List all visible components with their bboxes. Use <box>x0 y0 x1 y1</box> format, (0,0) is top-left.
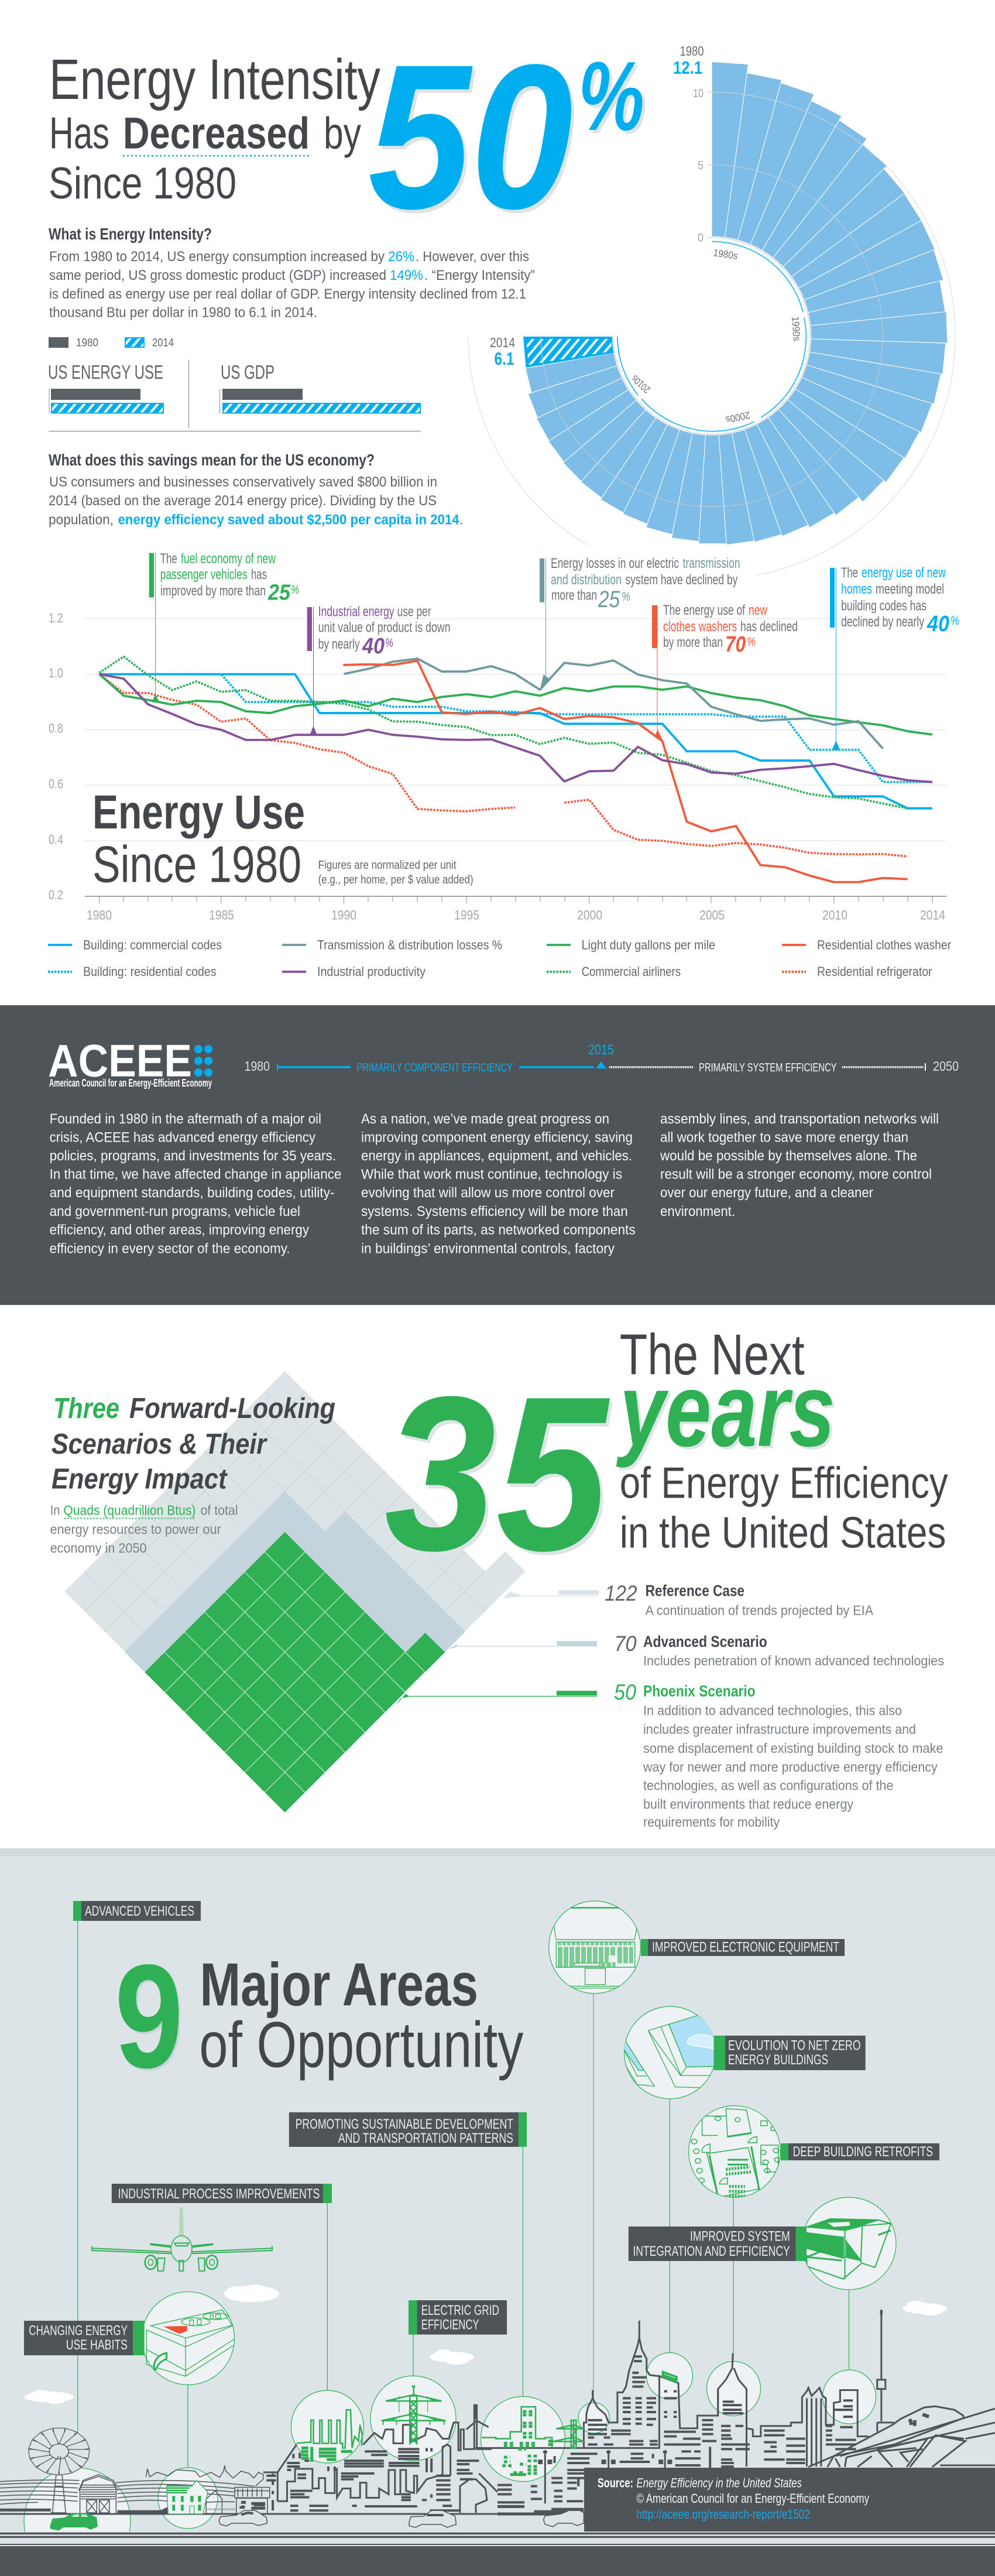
callout: new homes: % <box>951 614 959 628</box>
text block: what is energy intensity: From 1980 to 2014, US energy consumption increased by <box>49 249 385 265</box>
big number 35: 35 <box>385 1351 612 1597</box>
text column 3: over our energy future, and a cleaner <box>660 1185 873 1201</box>
windows <box>239 2448 479 2510</box>
scenario: phoenix: some displacement of existing building stock to make <box>643 1741 943 1756</box>
label: promoting sustainable development: AND TRANSPORTATION PATTERNS <box>338 2130 513 2146</box>
text column 2: As a nation, we’ve made great progress on <box>361 1111 609 1127</box>
timeline: 2050 <box>933 1059 959 1074</box>
text column 3: assembly lines, and transportation networks will <box>660 1111 939 1127</box>
label: industrial process improvements: INDUSTRIAL PROCESS IMPROVEMENTS <box>118 2186 320 2202</box>
callout: fuel economy <box>149 551 299 703</box>
callout: industrial energy: unit value of product is down <box>318 620 451 636</box>
note: normalized figures <box>318 859 474 886</box>
scenario: phoenix: Phoenix Scenario <box>643 1682 756 1700</box>
text block: savings: population, <box>49 512 114 528</box>
label: improved system integration and efficiency <box>629 2226 807 2261</box>
skyline: farm and town <box>0 2405 498 2527</box>
callout: industrial energy: % <box>385 636 393 650</box>
x axis labels: 2005 <box>699 907 725 923</box>
text block: savings: . <box>459 512 464 528</box>
text column 1 <box>50 1111 341 1256</box>
logo: ACEEE: American Council for an Energy-Efficient Economy <box>49 1077 212 1089</box>
scenario: phoenix: In addition to advanced technologies, this also <box>643 1703 902 1718</box>
scenario: advanced: Includes penetration of known advanced technologies <box>643 1653 944 1669</box>
text column 2: systems. Systems efficiency will be more than <box>361 1204 628 1220</box>
label: evolution to net zero energy buildings: ENERGY BUILDINGS <box>728 2052 828 2068</box>
scenario: phoenix: includes greater infrastructure improvements and <box>643 1722 916 1737</box>
callout: transmission losses: and distribution <box>551 572 622 588</box>
windmill lattice <box>51 2456 67 2513</box>
chart legend: Light duty gallons per mile <box>582 938 715 953</box>
label: improved system integration and efficiency: IMPROVED SYSTEM <box>690 2228 790 2245</box>
text column 3: result will be a stronger economy, more control <box>660 1166 932 1182</box>
text column 2: energy in appliances, equipment, and vehicles. <box>361 1148 632 1164</box>
callout: fuel economy: has <box>251 567 267 583</box>
line chart: energy use since 1980 <box>48 551 959 979</box>
icon: transmission tower <box>381 2386 446 2444</box>
bar chart: US GDP <box>220 361 421 413</box>
icon: net zero window <box>624 2006 719 2099</box>
title: by <box>324 109 361 158</box>
y axis labels: 0.4 <box>49 832 63 847</box>
callout: new homes: building codes has <box>841 598 927 614</box>
y axis labels: 1.0 <box>49 666 63 680</box>
text column 1: and government-run programs, vehicle fuel <box>50 1204 300 1220</box>
big number 50%: % <box>578 41 644 151</box>
callout: industrial energy: 40 <box>362 634 385 659</box>
bar chart: US energy use: US ENERGY USE <box>48 361 163 383</box>
big number 35: 35 <box>387 1354 615 1600</box>
magnifier circles on skyline <box>24 2352 876 2574</box>
icon: green city <box>482 2407 584 2475</box>
label: advanced vehicles <box>73 1901 201 1921</box>
callout: clothes washers: by more than <box>663 635 723 650</box>
source box: Energy Efficiency in the United States <box>636 2476 802 2491</box>
callout: industrial energy <box>307 604 451 735</box>
value labels: 6.1 <box>494 348 514 369</box>
scenario: phoenix: built environments that reduce energy <box>643 1797 853 1812</box>
text column 2: the sum of its parts, as networked components <box>361 1222 636 1238</box>
callout: fuel economy: fuel economy of new <box>181 551 276 567</box>
label: changing energy use habits <box>24 2321 145 2355</box>
label: improved electronic equipment: IMPROVED ELECTRONIC EQUIPMENT <box>652 1940 839 1955</box>
panel: ACEEE dark band <box>0 1005 995 1305</box>
source box: http://aceee.org/research-report/e1502 <box>636 2507 810 2522</box>
timeline: PRIMARILY SYSTEM EFFICIENCY <box>699 1061 837 1074</box>
skyline: downtown right <box>475 2310 995 2527</box>
icon: HVAC unit <box>802 2197 897 2290</box>
chart labels <box>629 247 802 425</box>
scenario: reference case: 122 <box>605 1581 637 1605</box>
callout: transmission losses: transmission <box>682 556 740 571</box>
label: changing energy use habits: USE HABITS <box>66 2337 128 2353</box>
chart labels: 2000s <box>725 409 751 425</box>
y axis labels: 0.8 <box>49 721 63 736</box>
text block: quads note: economy in 2050 <box>50 1540 147 1556</box>
heading: the next 35 years: years <box>616 1352 835 1468</box>
value labels: 12.1 <box>673 57 702 78</box>
heading: 9 major areas of opportunity: Major Areas <box>200 1951 478 2019</box>
title: Energy Intensity <box>49 47 380 111</box>
timeline <box>245 1042 959 1074</box>
text block: quads note <box>50 1502 238 1556</box>
bar chart: US GDP: US GDP <box>221 361 275 383</box>
heading: the next 35 years: years <box>619 1354 838 1471</box>
text column 3 <box>660 1111 939 1220</box>
heading: three forward-looking scenarios: Forward-Looking <box>129 1393 335 1424</box>
x axis labels: 2014 <box>920 907 945 923</box>
heading: three forward-looking scenarios: Scenarios & Their <box>52 1429 268 1460</box>
text block: what is energy intensity: 26% <box>388 249 414 265</box>
icon: green roof building <box>661 2371 678 2383</box>
train and viaduct <box>808 2406 964 2467</box>
text block: savings <box>49 451 464 528</box>
text column 1: efficiency in every sector of the economy. <box>50 1241 290 1256</box>
text block: what is energy intensity: 149% <box>390 268 423 283</box>
y axis labels: 0.6 <box>49 776 63 792</box>
icon: power strip <box>142 2291 235 2385</box>
chart legend: Residential clothes washer <box>817 938 951 953</box>
road cars <box>219 2510 267 2526</box>
value labels: 5 <box>698 159 704 172</box>
scenario: phoenix <box>614 1680 943 1830</box>
x axis labels: 2000 <box>577 907 602 923</box>
heading: 9 major areas of opportunity <box>115 1934 523 2101</box>
chart labels: 2010s <box>629 373 653 395</box>
label: deep building retrofits <box>781 2143 939 2160</box>
note: normalized figures: (e.g., per home, per $ value added) <box>318 873 474 886</box>
source box: © American Council for an Energy-Efficient Economy <box>636 2491 869 2506</box>
text block: savings: US consumers and businesses conservatively saved $800 billion in <box>49 474 437 490</box>
street lamps <box>545 2452 665 2503</box>
big number 50%: 50 <box>368 21 573 252</box>
text block: what is energy intensity: is defined as energy use per real dollar of GDP. Energy intensity declined from 12.1 <box>49 286 526 302</box>
title: Decreased <box>123 109 310 158</box>
panel: energy intensity header <box>48 21 647 528</box>
text block: savings: 2014 (based on the average 2014 energy price). Dividing by the US <box>49 493 437 509</box>
bar chart legend: 1980 <box>76 337 98 349</box>
label: evolution to net zero energy buildings: EVOLUTION TO NET ZERO <box>728 2038 861 2054</box>
small house and shop <box>206 2491 222 2513</box>
text column 3: environment. <box>660 1204 735 1220</box>
scenario: reference case <box>605 1581 874 1618</box>
x axis labels: 2010 <box>822 907 848 923</box>
heading: energy use since 1980: Since 1980 <box>92 835 301 893</box>
callout: new homes: energy use of new <box>862 565 946 581</box>
title: Since 1980 <box>49 159 236 208</box>
big number 50%: 50 <box>371 25 576 255</box>
x axis labels: 1985 <box>209 907 234 923</box>
heading: the next 35 years <box>616 1322 948 1557</box>
text column 3: all work together to save more energy than <box>660 1129 908 1145</box>
label: promoting sustainable development <box>289 2112 527 2147</box>
icon: floor plan <box>688 2105 781 2198</box>
callout: fuel economy: % <box>291 583 299 597</box>
callout: new homes: meeting model <box>876 581 944 597</box>
callout: clothes washers: % <box>747 635 756 649</box>
bottom road stripes <box>0 2533 995 2576</box>
callout: clothes washers: The energy use of <box>663 602 745 618</box>
label: electric grid efficiency: EFFICIENCY <box>421 2317 479 2332</box>
scenario: advanced: Advanced Scenario <box>643 1633 767 1650</box>
heading: energy use since 1980: Energy Use <box>92 786 305 839</box>
callout: clothes washers: has declined <box>740 619 798 635</box>
label: deep building retrofits: DEEP BUILDING RETROFITS <box>793 2144 933 2160</box>
logo: ACEEE: ACEEE <box>48 1035 192 1087</box>
timeline: 2015 <box>588 1042 614 1058</box>
x axis labels: 1990 <box>331 907 356 923</box>
title <box>49 47 380 208</box>
windows <box>498 2356 856 2502</box>
callout: new homes: homes <box>841 581 872 597</box>
text column 2: in buildings’ environmental controls, factory <box>361 1241 615 1256</box>
text block: what is energy intensity: . “Energy Intensity” <box>424 268 535 283</box>
text column 1: crisis, ACEEE has advanced energy efficiency <box>50 1129 315 1145</box>
text column 1: efficiency, and other areas, improving energy <box>50 1222 309 1238</box>
value labels: 2014 <box>490 335 515 350</box>
label: evolution to net zero energy buildings <box>714 2036 866 2070</box>
chart legend: Transmission & distribution losses % <box>317 938 502 953</box>
bar chart: US energy use <box>48 361 164 413</box>
chart legend: Commercial airliners <box>582 964 681 979</box>
bar chart legend <box>49 337 174 349</box>
note: normalized figures: Figures are normalized per unit <box>318 859 457 872</box>
chart labels: 1980s <box>712 247 739 262</box>
heading: the next 35 years: The Next <box>620 1322 805 1386</box>
clouds <box>25 2284 947 2404</box>
text column 1: and equipment standards, building codes, utility- <box>50 1185 335 1201</box>
scenario: reference case: A continuation of trends projected by EIA <box>646 1603 874 1618</box>
icon: factory <box>297 2410 362 2462</box>
radial bar chart: energy intensity 1980-2014 <box>468 43 955 576</box>
source box: Source: <box>598 2476 633 2491</box>
title: Has <box>49 109 109 158</box>
x axis labels: 1980 <box>87 907 112 923</box>
callout: industrial energy: use per <box>397 604 431 620</box>
label: improved electronic equipment <box>641 1939 845 1956</box>
chart legend: Residential refrigerator <box>817 964 932 979</box>
label: improved system integration and efficiency: INTEGRATION AND EFFICIENCY <box>633 2243 790 2259</box>
callout: new homes: declined by nearly <box>841 614 924 630</box>
chart legend <box>48 938 951 979</box>
panel: 9 major areas of opportunity <box>0 1848 995 2576</box>
text column 2: While that work must continue, technology is <box>361 1166 622 1182</box>
scenario: advanced: 70 <box>615 1632 637 1656</box>
text block: what is energy intensity: thousand Btu per dollar in 1980 to 6.1 in 2014. <box>49 305 317 321</box>
callout: fuel economy: The <box>160 551 177 567</box>
callout: fuel economy: improved by more than <box>160 583 266 599</box>
heading: 9 major areas of opportunity: of Opportunity <box>199 2009 523 2081</box>
callout: clothes washers: 70 <box>725 632 746 657</box>
heading: energy use since 1980 <box>92 786 305 893</box>
icon: green car <box>50 2513 98 2530</box>
callout: new homes: The <box>841 565 858 581</box>
label: promoting sustainable development: PROMOTING SUSTAINABLE DEVELOPMENT <box>296 2116 513 2132</box>
connector lines <box>78 1921 849 2468</box>
callout: transmission losses: more than <box>551 588 597 604</box>
text block: what is energy intensity: . However, over this <box>416 249 529 265</box>
text column 2: improving component energy efficiency, saving <box>361 1129 633 1145</box>
source box <box>584 2468 995 2532</box>
heading: three forward-looking scenarios: Energy Impact <box>52 1464 228 1495</box>
y axis labels: 1.2 <box>49 611 63 625</box>
scenario: phoenix: 50 <box>614 1680 636 1704</box>
chart legend: Industrial productivity <box>317 964 426 979</box>
text block: what is energy intensity: What is Energy Intensity? <box>49 225 212 243</box>
label: advanced vehicles: ADVANCED VEHICLES <box>85 1903 194 1919</box>
callout: new homes: 40 <box>927 612 949 636</box>
callout: clothes washers: clothes washers <box>663 619 737 635</box>
text column 3: would be possible by themselves alone. The <box>660 1148 917 1164</box>
text column 1: Founded in 1980 in the aftermath of a major oil <box>50 1111 321 1127</box>
text block: quads note: energy resources to power our <box>50 1522 221 1537</box>
text column 1: In that time, we have affected change in appliance <box>50 1166 341 1182</box>
value labels <box>490 43 704 369</box>
text column 2: evolving that will allow us more control over <box>361 1185 615 1201</box>
text block: savings: energy efficiency saved about $2,500 per capita in 2014 <box>118 512 459 528</box>
callout: clothes washers <box>652 602 798 741</box>
scenario: phoenix: requirements for mobility <box>643 1814 780 1830</box>
text block: quads note: of total <box>200 1502 238 1517</box>
scenario: reference case: Reference Case <box>646 1582 744 1599</box>
scenario: phoenix: technologies, as well as configurations of the <box>643 1777 893 1793</box>
text column 1: policies, programs, and investments for 35 years. <box>50 1148 336 1164</box>
downtown outlines <box>263 2472 277 2501</box>
scenario: phoenix: way for newer and more productive energy efficiency <box>643 1759 938 1775</box>
big number 50%: % <box>581 44 647 154</box>
far village <box>146 2465 263 2486</box>
text block: quads note: In <box>50 1502 60 1517</box>
callout: industrial energy: by nearly <box>318 636 360 652</box>
icon: green house <box>167 2481 208 2514</box>
heading: three forward-looking scenarios: Three <box>53 1393 119 1424</box>
chart legend: Building: commercial codes <box>83 938 222 953</box>
barn <box>78 2475 118 2513</box>
x axis labels: 1995 <box>454 907 479 923</box>
heading: the next 35 years: in the United States <box>620 1508 946 1557</box>
callout: transmission losses: 25 <box>598 587 620 612</box>
scenario: advanced <box>615 1632 944 1669</box>
chart legend: Building: residential codes <box>83 964 217 979</box>
text block: savings: What does this savings mean for the US economy? <box>49 451 375 469</box>
timeline: 1980 <box>245 1059 270 1074</box>
callout: industrial energy: Industrial energy <box>318 604 394 620</box>
x axis labels <box>87 907 945 923</box>
value labels: 10 <box>693 87 704 100</box>
timeline: PRIMARILY COMPONENT EFFICIENCY <box>357 1061 513 1074</box>
y axis labels: 0.2 <box>49 888 63 902</box>
text block: what is energy intensity <box>49 225 535 321</box>
heading: 9 major areas of opportunity: 9 <box>116 1937 185 2101</box>
y axis labels <box>49 611 63 902</box>
data series <box>100 657 932 882</box>
callout: fuel economy: 25 <box>267 581 291 605</box>
heading: 9 major areas of opportunity: 9 <box>115 1934 183 2099</box>
icon: laptop <box>548 1900 641 1994</box>
label: electric grid efficiency <box>409 2300 507 2335</box>
text column 2 <box>361 1111 636 1256</box>
panel: next 35 years <box>50 1322 948 1830</box>
value labels: 0 <box>698 232 704 245</box>
callout: transmission losses <box>540 556 740 690</box>
text block: what is energy intensity: same period, US gross domestic product (GDP) increased <box>49 268 386 283</box>
bar chart legend: 2014 <box>152 337 174 349</box>
callout: new homes <box>830 565 959 750</box>
label: industrial process improvements <box>112 2184 332 2203</box>
icon: airplane <box>92 2207 272 2271</box>
callout: transmission losses: system have declined by <box>625 572 737 588</box>
text block: quads note: Quads (quadrillion Btus) <box>63 1502 195 1517</box>
callout: clothes washers: new <box>749 602 767 618</box>
heading: three forward-looking scenarios <box>52 1393 335 1495</box>
callout: transmission losses: Energy losses in our electric <box>551 556 679 571</box>
callout: transmission losses: % <box>622 590 630 604</box>
callout: fuel economy: passenger vehicles <box>160 567 248 583</box>
label: changing energy use habits: CHANGING ENERGY <box>29 2322 128 2338</box>
diamond chart: quads by scenario <box>64 1371 599 1813</box>
chart labels: 1990s <box>790 316 802 341</box>
value labels: 1980 <box>680 43 704 59</box>
label: electric grid efficiency: ELECTRIC GRID <box>421 2303 499 2318</box>
